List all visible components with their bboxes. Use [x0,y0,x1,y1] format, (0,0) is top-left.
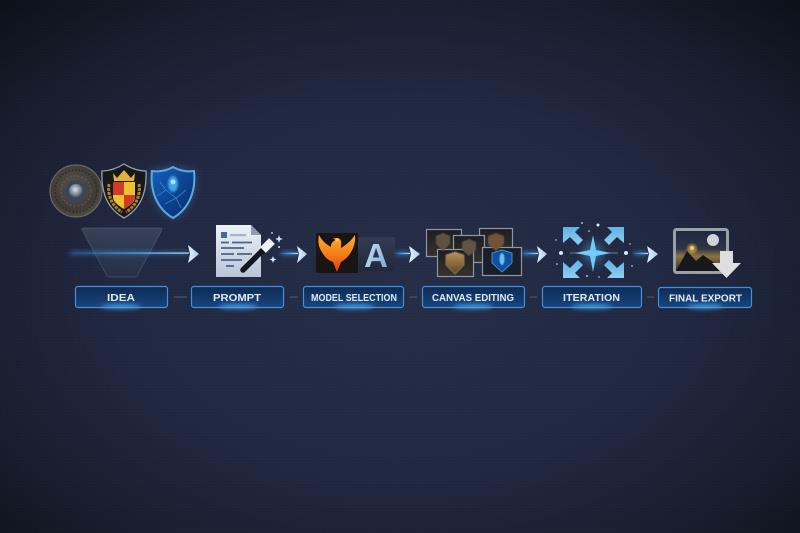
label: idea [76,286,168,308]
icon: letter A app tile [358,237,395,274]
icon: crest shield [102,164,146,218]
arrow: model selection to canvas editing [394,246,420,263]
label: model selection: MODEL SELECTION [311,292,397,304]
label: canvas editing: CANVAS EDITING [432,292,514,304]
arrow: prompt to model selection [278,246,307,263]
icon: canvas thumbnail collage [426,228,522,276]
icon: image with download arrow [674,230,741,278]
label: idea: IDEA [107,292,135,304]
icon: translucent funnel [82,228,162,277]
icon: letter A app tile: A [364,237,388,274]
arrow: idea to prompt [63,245,199,263]
expand arrows [563,227,624,278]
label: model selection [304,286,404,308]
label: iteration [542,286,642,308]
icon: wand sparkles [270,232,283,263]
label: prompt [192,286,284,308]
connector ticks [174,296,654,298]
arrow: canvas editing to iteration [522,246,547,263]
icon: document with magic wand [216,225,283,277]
label: canvas editing [422,286,524,308]
icon group: three shields [50,164,194,218]
label: final export [658,288,752,308]
sparkles [555,222,633,278]
icon: digital blue shield [152,167,194,218]
label: iteration: ITERATION [563,292,620,304]
icon: round metal shield [50,165,102,217]
label: final export: FINAL EXPORT [669,292,743,304]
icon: iteration expanding arrows and star [555,222,633,278]
arrow: iteration to final export [632,246,658,263]
icon: phoenix app tile [316,233,358,273]
label: prompt: PROMPT [213,292,262,304]
